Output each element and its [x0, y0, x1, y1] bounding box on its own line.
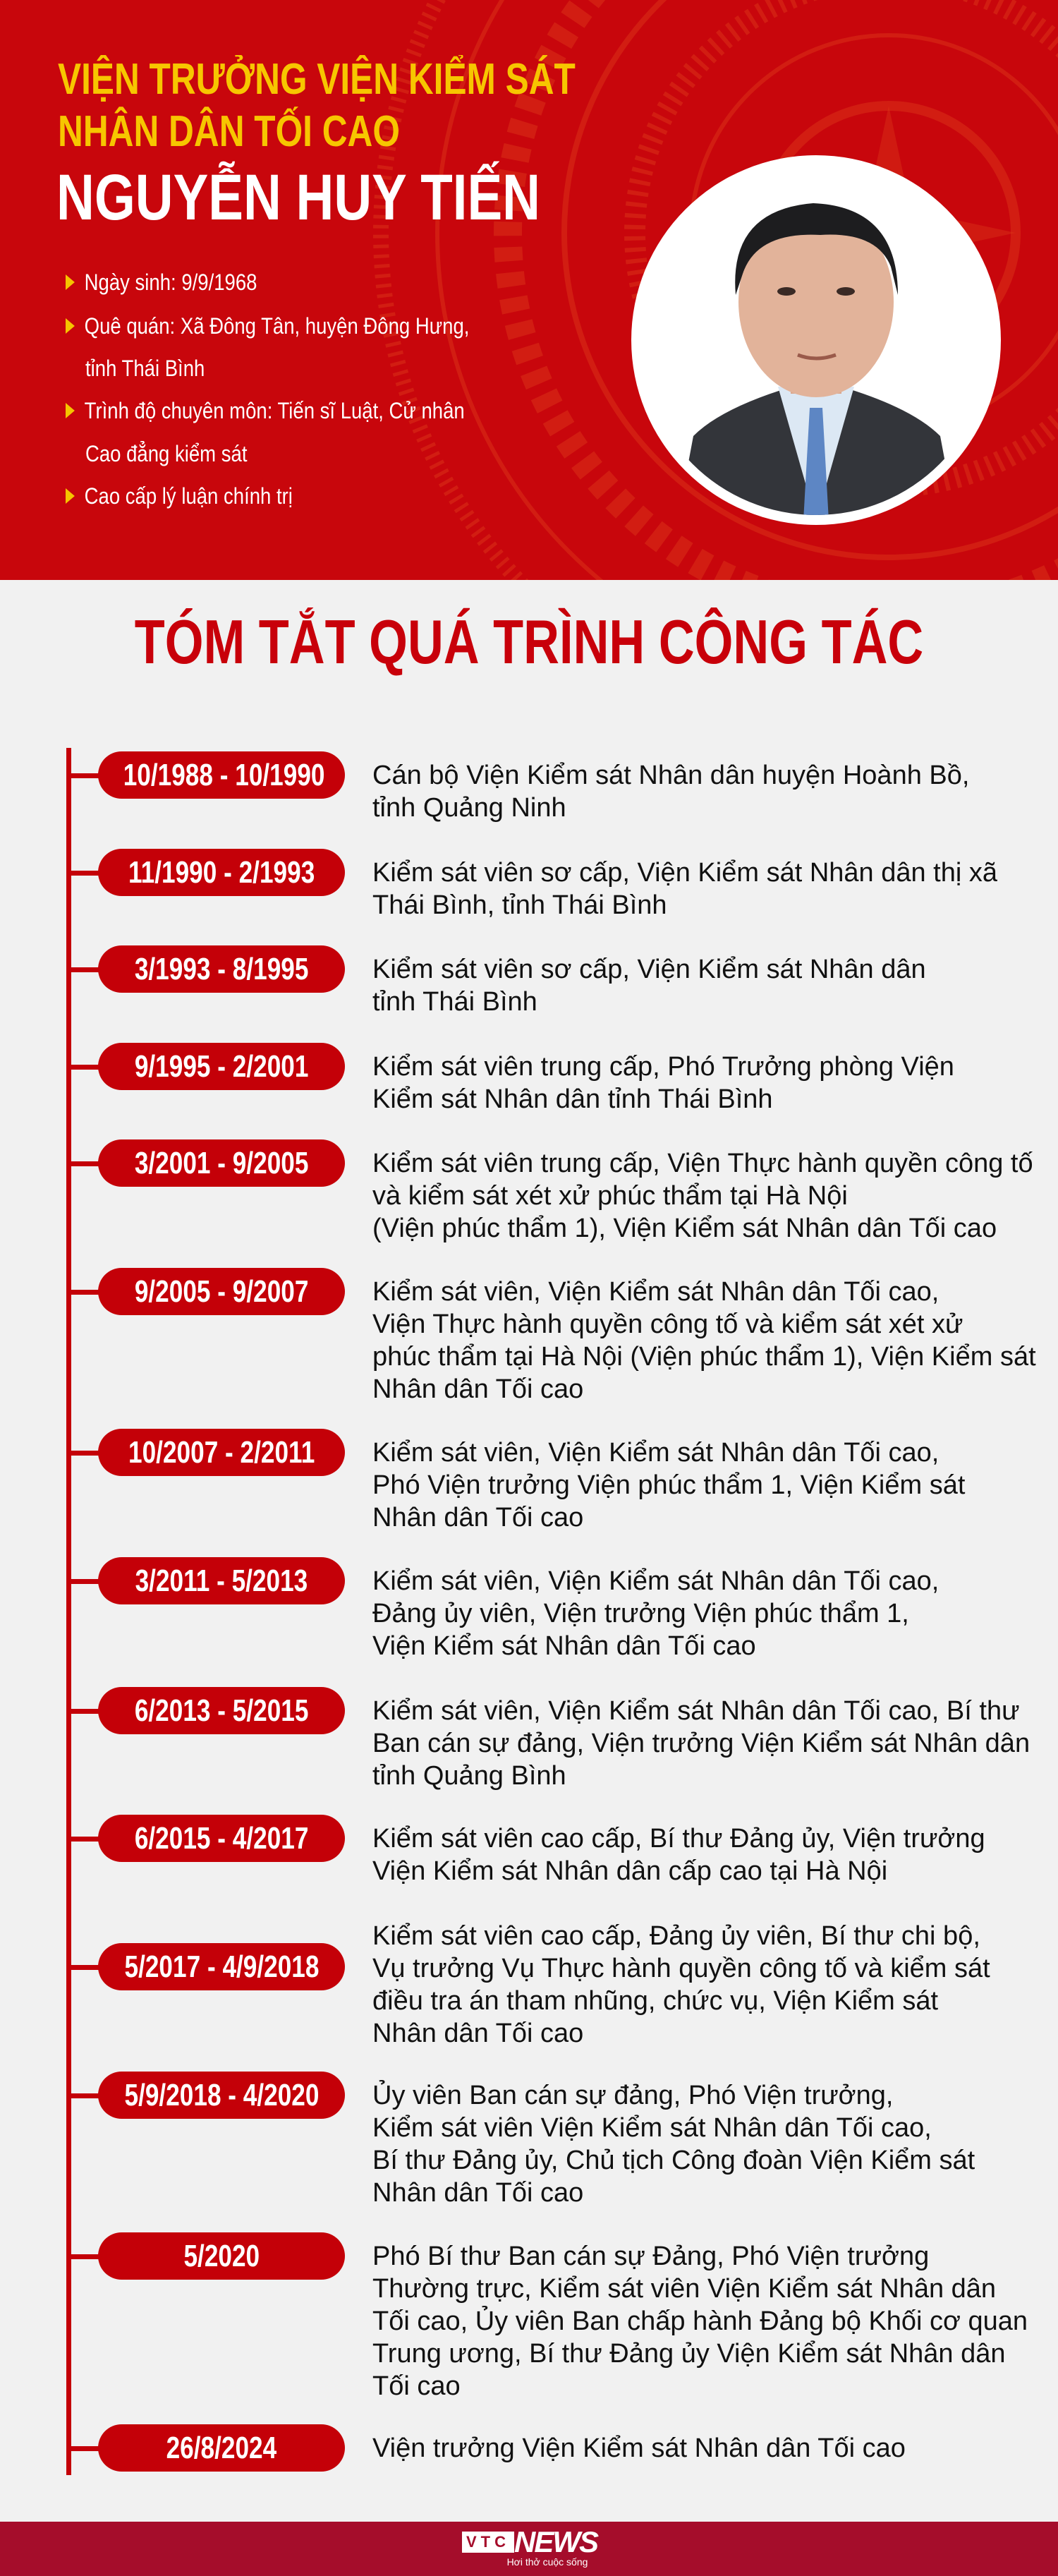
- item 14: 26/8/2024: [166, 2431, 276, 2465]
- title: VIỆN TRƯỞNG VIỆN KIỂM SÁT: [58, 55, 576, 104]
- item 12: Nhân dân Tối cao: [372, 2178, 583, 2208]
- item 13: Thường trực, Kiểm sát viên Viện Kiểm sát Nhân dân: [372, 2274, 996, 2304]
- item 3: [71, 945, 926, 1017]
- item 1: Cán bộ Viện Kiểm sát Nhân dân huyện Hoành Bồ,: [372, 761, 969, 790]
- item 13: Phó Bí thư Ban cán sự Đảng, Phó Viện trưởng: [372, 2242, 929, 2271]
- item 11: Kiểm sát viên cao cấp, Đảng ủy viên, Bí thư chi bộ,: [372, 1921, 980, 1951]
- item 3: Kiểm sát viên sơ cấp, Viện Kiểm sát Nhân dân: [372, 955, 926, 984]
- item 2: [71, 849, 997, 920]
- item 9: Ban cán sự đảng, Viện trưởng Viện Kiểm sát Nhân dân: [372, 1729, 1030, 1758]
- item 2: Kiểm sát viên sơ cấp, Viện Kiểm sát Nhân dân thị xã: [372, 858, 997, 888]
- item 8: 3/2011 - 5/2013: [135, 1564, 308, 1598]
- item 12: [71, 2072, 975, 2208]
- item 6: [71, 1268, 1036, 1404]
- name heading: NGUYỄN HUY TIẾN: [56, 162, 540, 234]
- item 6: 9/2005 - 9/2007: [135, 1274, 308, 1309]
- item 2: Thái Bình, tỉnh Thái Bình: [372, 890, 667, 920]
- timeline vertical line: [66, 748, 71, 2475]
- footer: [0, 2522, 1058, 2576]
- item 10: 6/2015 - 4/2017: [135, 1821, 308, 1856]
- item 12: 5/9/2018 - 4/2020: [124, 2078, 319, 2112]
- item 11: điều tra án tham nhũng, chức vụ, Viện Kiểm sát: [372, 1986, 938, 2016]
- item 6: Nhân dân Tối cao: [372, 1374, 583, 1404]
- item 4: Kiểm sát Nhân dân tỉnh Thái Bình: [372, 1084, 773, 1114]
- item 9: Kiểm sát viên, Viện Kiểm sát Nhân dân Tối cao, Bí thư: [372, 1696, 1020, 1726]
- item 13: [71, 2232, 1028, 2401]
- item 7: Phó Viện trưởng Viện phúc thẩm 1, Viện Kiểm sát: [372, 1470, 965, 1500]
- item 7: Kiểm sát viên, Viện Kiểm sát Nhân dân Tối cao,: [372, 1438, 939, 1468]
- bio bullets: Trình độ chuyên môn: Tiến sĩ Luật, Cử nhân: [85, 398, 465, 423]
- item 9: 6/2013 - 5/2015: [135, 1693, 308, 1728]
- title: [58, 55, 576, 156]
- item 7: [71, 1429, 965, 1532]
- item 4: [71, 1043, 954, 1114]
- bio bullets: Ngày sinh: 9/9/1968: [85, 270, 257, 295]
- item 8: Đảng ủy viên, Viện trưởng Viện phúc thẩm 1,: [372, 1599, 909, 1628]
- item 8: [71, 1557, 939, 1661]
- item 13: Tối cao, Ủy viên Ban chấp hành Đảng bộ Khối cơ quan: [372, 2306, 1028, 2336]
- item 12: Ủy viên Ban cán sự đảng, Phó Viện trưởng,: [372, 2081, 893, 2110]
- logo: VTC NEWS: NEWS: [514, 2525, 597, 2558]
- item 2: 11/1990 - 2/1993: [128, 855, 315, 890]
- item 8: Kiểm sát viên, Viện Kiểm sát Nhân dân Tối cao,: [372, 1566, 939, 1596]
- logo: VTC NEWS: [462, 2525, 599, 2568]
- item 14: Viện trưởng Viện Kiểm sát Nhân dân Tối cao: [372, 2433, 906, 2463]
- item 3: tỉnh Thái Bình: [372, 987, 537, 1017]
- item 10: Kiểm sát viên cao cấp, Bí thư Đảng ủy, Viện trưởng: [372, 1824, 985, 1854]
- item 11: 5/2017 - 4/9/2018: [124, 1949, 319, 1984]
- item 14: [71, 2424, 906, 2472]
- bio bullets: tỉnh Thái Bình: [85, 356, 205, 381]
- item 1: tỉnh Quảng Ninh: [372, 793, 566, 823]
- title: NHÂN DÂN TỐI CAO: [58, 107, 400, 156]
- section title: TÓM TẮT QUÁ TRÌNH CÔNG TÁC: [135, 607, 923, 677]
- item 11: [71, 1921, 990, 2048]
- logo: VTC NEWS: VTC: [466, 2533, 510, 2551]
- item 6: phúc thẩm tại Hà Nội (Viện phúc thẩm 1), Viện Kiểm sát: [372, 1342, 1036, 1372]
- header panel: [0, 0, 1058, 580]
- item 7: 10/2007 - 2/2011: [128, 1435, 315, 1470]
- item 8: Viện Kiểm sát Nhân dân Tối cao: [372, 1631, 756, 1661]
- bio bullets: Cao đẳng kiểm sát: [85, 441, 247, 466]
- item 5: [71, 1139, 1033, 1243]
- item 6: Kiểm sát viên, Viện Kiểm sát Nhân dân Tối cao,: [372, 1277, 939, 1307]
- item 13: 5/2020: [183, 2239, 260, 2273]
- item 12: Bí thư Đảng ủy, Chủ tịch Công đoàn Viện Kiểm sát: [372, 2146, 975, 2175]
- decorative drum pattern: [373, 0, 1058, 580]
- item 6: Viện Thực hành quyền công tố và kiểm sát xét xử: [372, 1310, 963, 1339]
- timeline: [66, 748, 71, 2475]
- bio bullets: [66, 270, 469, 509]
- item 5: Kiểm sát viên trung cấp, Viện Thực hành quyền công tố: [372, 1149, 1033, 1178]
- item 10: Viện Kiểm sát Nhân dân cấp cao tại Hà Nội: [372, 1856, 887, 1886]
- logo: VTC NEWS: Hơi thở cuộc sống: [507, 2556, 588, 2568]
- item 9: [71, 1687, 1030, 1791]
- item 4: Kiểm sát viên trung cấp, Phó Trưởng phòng Viện: [372, 1052, 954, 1082]
- item 10: [71, 1815, 985, 1886]
- item 11: Vụ trưởng Vụ Thực hành quyền công tố và kiểm sát: [372, 1954, 990, 1983]
- bio bullets: Cao cấp lý luận chính trị: [85, 483, 293, 509]
- item 7: Nhân dân Tối cao: [372, 1503, 583, 1532]
- item 1: [71, 751, 969, 823]
- item 9: tỉnh Quảng Bình: [372, 1761, 566, 1791]
- item 1: 10/1988 - 10/1990: [123, 758, 324, 792]
- item 5: và kiểm sát xét xử phúc thẩm tại Hà Nội: [372, 1181, 848, 1211]
- portrait photo: [631, 155, 1001, 525]
- item 3: 3/1993 - 8/1995: [135, 952, 308, 986]
- item 5: 3/2001 - 9/2005: [135, 1146, 308, 1180]
- item 13: Trung ương, Bí thư Đảng ủy Viện Kiểm sát Nhân dân: [372, 2339, 1006, 2369]
- item 11: Nhân dân Tối cao: [372, 2019, 583, 2048]
- bio bullets: Quê quán: Xã Đông Tân, huyện Đông Hưng,: [85, 313, 469, 339]
- item 5: (Viện phúc thẩm 1), Viện Kiểm sát Nhân dân Tối cao: [372, 1214, 997, 1243]
- item 4: 9/1995 - 2/2001: [135, 1049, 308, 1084]
- item 12: Kiểm sát viên Viện Kiểm sát Nhân dân Tối cao,: [372, 2113, 932, 2143]
- item 13: Tối cao: [372, 2371, 461, 2401]
